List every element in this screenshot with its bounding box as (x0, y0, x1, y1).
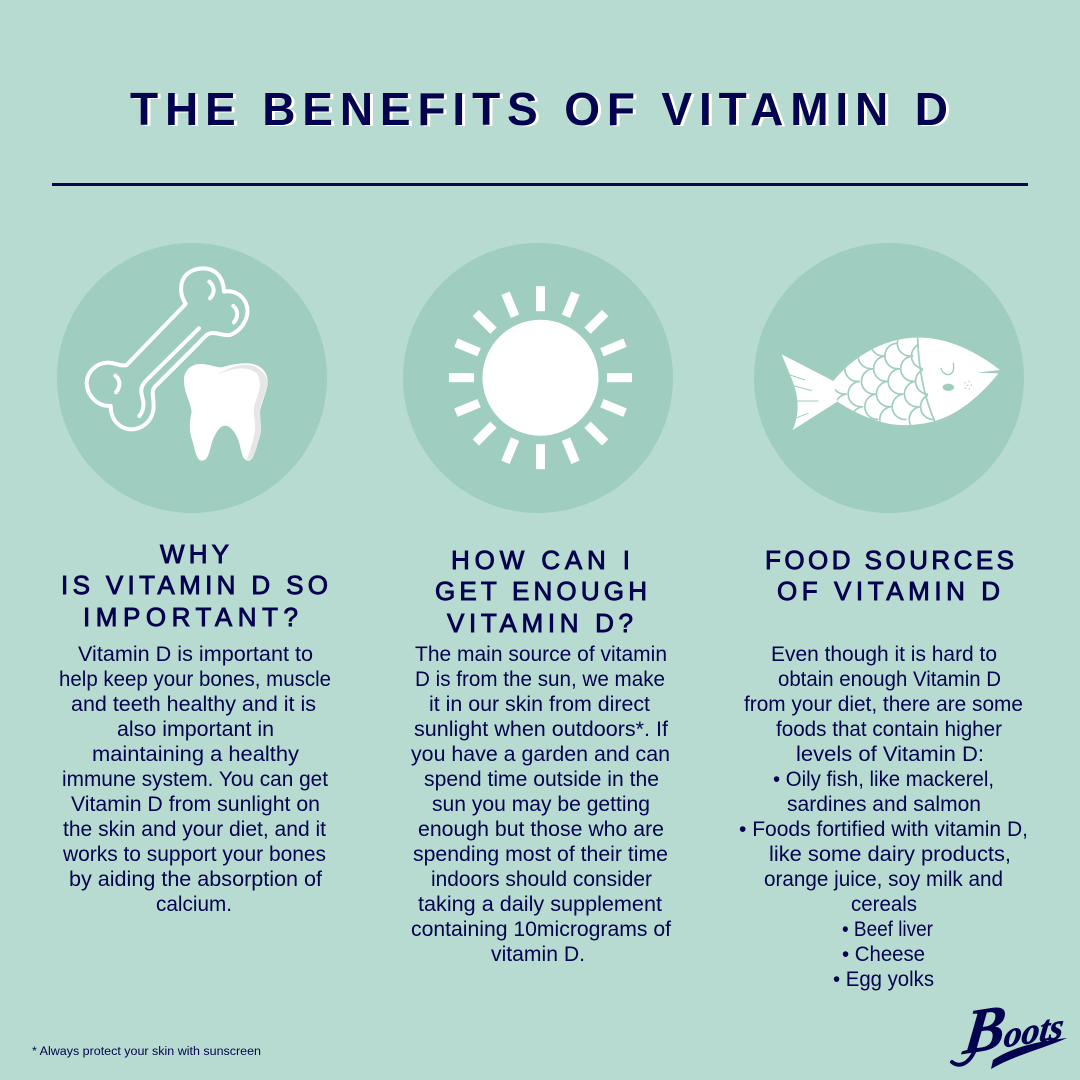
text block: why is vitamin D so important (59, 643, 331, 916)
text block: food sources of vitamin D: obtain enough Vitamin D (778, 668, 1001, 691)
text block: food sources of vitamin D: cereals (851, 893, 917, 916)
text block: food sources of vitamin D: • Foods fortified with vitamin D, (739, 818, 1028, 841)
text block: food sources of vitamin D: foods that contain higher (776, 718, 1002, 741)
heading: how can I get enough vitamin D: HOW CAN I (451, 545, 630, 575)
text block: why is vitamin D so important: works to support your bones (62, 843, 326, 866)
text block: how can I get enough vitamin D: sun you may be getting (432, 793, 650, 816)
text block: why is vitamin D so important: Vitamin D is important to (78, 643, 313, 666)
icon: bone and tooth (57, 243, 327, 513)
text block: food sources of vitamin D: • Egg yolks (833, 968, 934, 991)
text block: food sources of vitamin D: • Oily fish, like mackerel, (773, 768, 994, 791)
logo: Boots: Boots (959, 981, 1069, 1068)
heading: food sources of vitamin D: FOOD SOURCES (765, 545, 1014, 575)
text block: food sources of vitamin D: orange juice, soy milk and (764, 868, 1003, 891)
heading: why is vitamin D so important: WHY (160, 539, 229, 569)
text block: how can I get enough vitamin D (411, 643, 671, 966)
text block: why is vitamin D so important: immune system. You can get (62, 768, 328, 791)
heading: food sources of vitamin D: OF VITAMIN D (777, 576, 1000, 606)
panel: how can I get enough vitamin D (403, 243, 673, 966)
text block: food sources of vitamin D: levels of Vitamin D: (796, 743, 984, 766)
heading: why is vitamin D so important: IMPORTANT? (83, 602, 298, 632)
text block: how can I get enough vitamin D: it in our skin from direct (429, 693, 650, 716)
heading: how can I get enough vitamin D: GET ENOUGH (435, 576, 647, 606)
text block: how can I get enough vitamin D: spending most of their time (413, 843, 668, 866)
text block: why is vitamin D so important: the skin and your diet, and it (63, 818, 326, 841)
text block: how can I get enough vitamin D: vitamin D. (491, 943, 585, 966)
heading: food sources of vitamin D (765, 545, 1014, 606)
text block: food sources of vitamin D: from your diet, there are some (744, 693, 1023, 716)
text block: food sources of vitamin D (739, 643, 1028, 991)
text block: why is vitamin D so important: and teeth healthy and it is (71, 693, 316, 716)
panel: why is vitamin D so important (57, 243, 331, 916)
text block: how can I get enough vitamin D: spend time outside in the (424, 768, 659, 791)
footnote: * Always protect your skin with sunscreen (32, 1046, 261, 1058)
text block: how can I get enough vitamin D: D is from the sun, we make (415, 668, 665, 691)
text block: how can I get enough vitamin D: sunlight when outdoors*. If (414, 718, 668, 741)
heading: why is vitamin D so important: IS VITAMIN D SO (61, 570, 328, 600)
icon: sun (403, 243, 673, 513)
text block: how can I get enough vitamin D: containing 10micrograms of (411, 918, 671, 941)
title: THE BENEFITS OF VITAMIN D (130, 83, 948, 135)
heading: why is vitamin D so important (61, 539, 328, 632)
text block: food sources of vitamin D: • Cheese (842, 943, 925, 966)
text block: how can I get enough vitamin D: taking a daily supplement (418, 893, 662, 916)
text block: why is vitamin D so important: help keep your bones, muscle (59, 668, 331, 691)
text block: how can I get enough vitamin D: enough but those who are (418, 818, 664, 841)
text block: food sources of vitamin D: Even though it is hard to (771, 643, 997, 666)
text block: why is vitamin D so important: also important in (117, 718, 274, 741)
text block: how can I get enough vitamin D: indoors should consider (431, 868, 652, 891)
text block: food sources of vitamin D: sardines and salmon (787, 793, 981, 816)
text block: why is vitamin D so important: Vitamin D from sunlight on (71, 793, 320, 816)
text block: food sources of vitamin D: • Beef liver (842, 918, 933, 941)
text block: why is vitamin D so important: calcium. (156, 893, 232, 916)
heading: how can I get enough vitamin D (435, 545, 647, 638)
heading: how can I get enough vitamin D: VITAMIN D? (447, 608, 633, 638)
icon: fish (754, 243, 1024, 513)
text block: why is vitamin D so important: by aiding the absorption of (69, 868, 322, 891)
text block: how can I get enough vitamin D: The main source of vitamin (415, 643, 667, 666)
title: THE BENEFITS OF VITAMIN D (133, 84, 951, 136)
text block: how can I get enough vitamin D: you have a garden and can (411, 743, 670, 766)
text block: why is vitamin D so important: maintaining a healthy (92, 743, 300, 766)
text block: food sources of vitamin D: like some dairy products, (769, 843, 1011, 866)
panel: food sources of vitamin D (739, 243, 1028, 991)
